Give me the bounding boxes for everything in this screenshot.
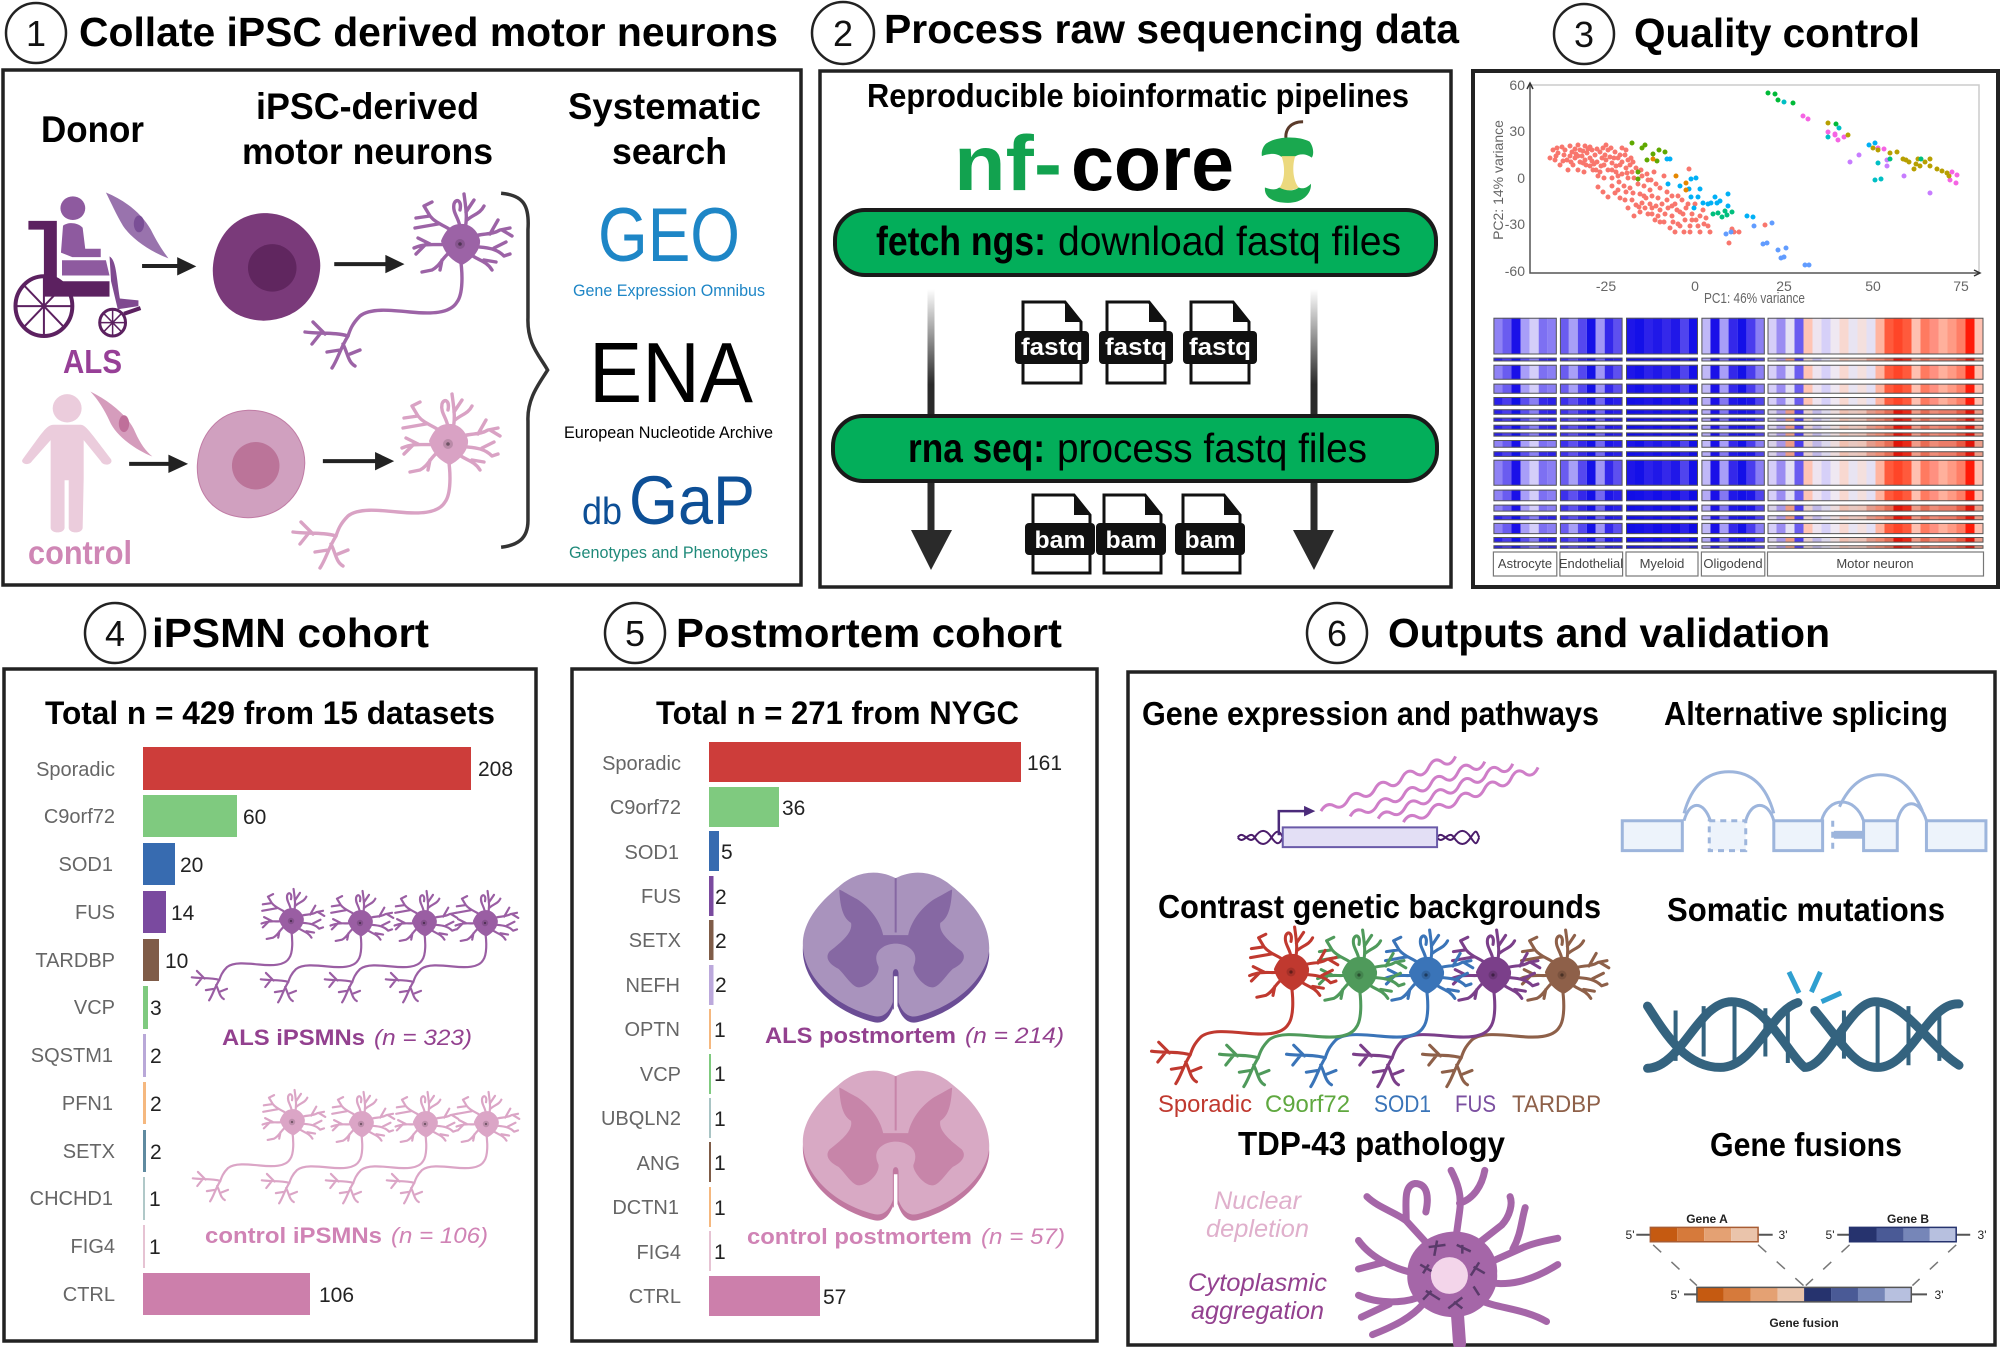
labels: gene fusion diagram: 5' xyxy=(1671,1288,1679,1302)
icon: fastq files: fastq xyxy=(1189,334,1251,361)
label: nuclear depletion xyxy=(1206,1187,1309,1243)
label: ALS iPSMNs: ALS iPSMNs xyxy=(222,1025,365,1050)
column heading: systematic search: Systematic xyxy=(568,86,761,127)
bar chart: iPSMN genetic backgrounds: PFN1 xyxy=(62,1093,113,1115)
subheading: gene expression: Gene expression and pathways xyxy=(1142,695,1599,732)
chart: PCA scatter: -25 xyxy=(1596,278,1616,294)
labels: gene fusion diagram xyxy=(1626,1212,1986,1330)
chart: marker gene heatmap xyxy=(1493,318,1984,549)
subheading: contrast genetic backgrounds: Contrast genetic backgrounds xyxy=(1158,888,1601,925)
label: cytoplasmic aggregation: Cytoplasmic xyxy=(1188,1269,1327,1297)
legend: genotype labels: SOD1 xyxy=(1374,1091,1431,1118)
column heading: iPSC-derived motor neurons xyxy=(242,86,493,172)
bar chart: postmortem genetic backgrounds: Sporadic xyxy=(602,753,681,775)
legend: genotype labels: FUS xyxy=(1455,1091,1496,1118)
bar chart: iPSMN genetic backgrounds: VCP xyxy=(74,997,115,1019)
label: ALS: ALS xyxy=(63,343,122,380)
subheading: TDP-43 pathology: TDP-43 pathology xyxy=(1238,1125,1506,1162)
bar chart: postmortem genetic backgrounds: 1 xyxy=(714,1108,726,1131)
bar chart: postmortem genetic backgrounds: 1 xyxy=(714,1152,726,1175)
step 5 number badge xyxy=(605,603,665,663)
label: ALS postmortem: ALS postmortem xyxy=(765,1023,956,1048)
bar chart: iPSMN genetic backgrounds: 2 xyxy=(150,1141,162,1164)
panel: quality control xyxy=(1473,71,1998,587)
icon: bam files: bam xyxy=(1034,527,1086,554)
icon: control iPSC xyxy=(197,410,305,518)
label: ALS postmortem: (n = 214) xyxy=(965,1023,1064,1048)
label: nuclear depletion: Nuclear xyxy=(1214,1187,1303,1215)
labels: gene fusion diagram: Gene fusion xyxy=(1769,1316,1839,1330)
pipeline: rna seq xyxy=(833,416,1437,481)
heatmap cell type labels: Motor neuron xyxy=(1836,556,1914,571)
bar chart: iPSMN genetic backgrounds: TARDBP xyxy=(35,950,115,972)
bar chart: iPSMN genetic backgrounds: 3 xyxy=(150,997,162,1020)
bar chart: iPSMN genetic backgrounds: 14 xyxy=(171,902,195,925)
arrow: iPSC to neuron xyxy=(334,255,404,273)
subheading: somatic mutations: Somatic mutations xyxy=(1667,891,1945,928)
icon: ALS motor neuron xyxy=(305,194,512,368)
logo: nf-core: core xyxy=(1071,119,1234,207)
heading: step 4: iPSMN cohort xyxy=(152,610,429,656)
bar chart: iPSMN genetic backgrounds: FIG4 xyxy=(71,1236,115,1258)
bar chart: postmortem genetic backgrounds: SETX xyxy=(629,930,681,952)
step 1 number badge xyxy=(6,3,66,63)
bar chart: postmortem genetic backgrounds: DCTN1 xyxy=(612,1197,679,1219)
arrow: control iPSC to neuron xyxy=(323,452,394,470)
step 2 number badge xyxy=(812,2,874,64)
bracket xyxy=(501,193,548,547)
bar chart: iPSMN genetic backgrounds: 2 xyxy=(150,1045,162,1068)
database: ENA: European Nucleotide Archive xyxy=(564,423,773,442)
step 6 number badge xyxy=(1307,603,1367,663)
bar chart: iPSMN genetic backgrounds: 1 xyxy=(149,1188,161,1211)
bar chart: iPSMN genetic backgrounds: 1 xyxy=(149,1236,161,1259)
step 5 number badge: 5 xyxy=(625,613,645,654)
bar chart: postmortem genetic backgrounds: 5 xyxy=(721,841,733,864)
step 4 number badge: 4 xyxy=(105,613,125,654)
step 4 number badge xyxy=(85,603,145,663)
icon: bam files: bam xyxy=(1184,527,1236,554)
icon: gene fusion diagram xyxy=(1636,1227,1970,1302)
chart: PCA scatter: 0 xyxy=(1517,170,1525,186)
arrow: control donor to iPSC xyxy=(129,455,188,473)
icon: fastq files: fastq xyxy=(1021,334,1083,361)
bar chart: postmortem genetic backgrounds: FUS xyxy=(641,886,681,908)
bar chart: iPSMN genetic backgrounds: 106 xyxy=(319,1284,354,1307)
column heading: iPSC-derived motor neurons: motor neurons xyxy=(242,131,493,172)
bar chart: iPSMN genetic backgrounds: 10 xyxy=(165,950,188,973)
label: nuclear depletion: depletion xyxy=(1206,1215,1309,1243)
bar chart: postmortem genetic backgrounds: 57 xyxy=(823,1286,846,1309)
icon: ALS iPSMN neurons xyxy=(192,889,518,1002)
labels: gene fusion diagram: 3' xyxy=(1779,1228,1787,1242)
icon: coloured neurons by genotype xyxy=(1152,927,1609,1087)
chart: PCA scatter: 50 xyxy=(1865,278,1881,294)
step 3 number badge xyxy=(1554,4,1614,64)
subheading: gene fusions: Gene fusions xyxy=(1710,1126,1902,1163)
icon: bam files xyxy=(1025,495,1245,573)
bar chart: iPSMN genetic backgrounds: SQSTM1 xyxy=(31,1045,113,1067)
chart: PCA scatter: 0 xyxy=(1691,278,1699,294)
icon: TDP-43 neuron xyxy=(1359,1170,1558,1343)
icon: ALS donor in wheelchair xyxy=(15,196,141,336)
column heading: iPSC-derived motor neurons: iPSC-derived xyxy=(256,86,479,127)
label: control iPSMNs: (n = 106) xyxy=(391,1223,488,1248)
subheading: alternative splicing: Alternative splicing xyxy=(1664,695,1948,732)
bar chart: iPSMN genetic backgrounds: 60 xyxy=(243,806,266,829)
database: GEO: Gene Expression Omnibus xyxy=(573,281,765,300)
icon: ALS spinal cord xyxy=(803,873,989,1023)
labels: gene fusion diagram: 5' xyxy=(1826,1228,1834,1242)
bar chart: iPSMN genetic backgrounds: C9orf72 xyxy=(44,806,115,828)
icon: bam files: bam xyxy=(1106,527,1156,554)
pipeline: fetch ngs: fetch ngs: xyxy=(876,218,1046,264)
bar chart: iPSMN genetic backgrounds: 2 xyxy=(150,1093,162,1116)
icon: fastq files xyxy=(1015,302,1257,383)
pipeline: rna seq: process fastq files xyxy=(1057,425,1367,471)
labels: gene fusion diagram: Gene A xyxy=(1686,1212,1728,1226)
chart: PCA scatter: -30 xyxy=(1505,216,1525,232)
label: control postmortem xyxy=(747,1224,1065,1249)
bar chart: iPSMN genetic backgrounds: SOD1 xyxy=(59,854,113,876)
chart: PCA scatter: -60 xyxy=(1505,263,1525,279)
bar chart: iPSMN genetic backgrounds: CTRL xyxy=(63,1284,115,1306)
chart: PCA scatter: PC2: 14% variance xyxy=(1490,120,1506,240)
bar chart: postmortem genetic backgrounds: 2 xyxy=(715,930,727,953)
label: cytoplasmic aggregation: aggregation xyxy=(1191,1297,1324,1325)
chart: PCA scatter: PC1: 46% variance xyxy=(1704,290,1805,307)
icon: ALS fibroblast xyxy=(106,192,168,258)
panel: process raw sequencing data xyxy=(820,71,1451,587)
chart: PCA scatter xyxy=(1490,77,1980,307)
bar chart: iPSMN genetic backgrounds: Sporadic xyxy=(36,759,115,781)
label: control iPSMNs xyxy=(205,1223,488,1248)
bar chart: postmortem genetic backgrounds: 1 xyxy=(714,1019,726,1042)
bar chart: postmortem genetic backgrounds: VCP xyxy=(640,1064,681,1086)
step 1 number badge: 1 xyxy=(26,13,46,54)
bar chart: iPSMN genetic backgrounds: 208 xyxy=(478,758,513,781)
labels: gene fusion diagram: Gene B xyxy=(1887,1212,1929,1226)
icon: control iPSMN neurons xyxy=(193,1090,519,1203)
arrow: right pipeline flow xyxy=(1293,289,1334,570)
chart: PCA scatter: 25 xyxy=(1776,278,1792,294)
panel: collate iPSC motor neurons xyxy=(3,70,801,585)
arrow: left pipeline flow xyxy=(911,289,952,570)
database: ENA: ENA xyxy=(589,326,753,421)
label: control: control xyxy=(28,534,132,571)
bar chart: postmortem genetic backgrounds: ANG xyxy=(637,1153,680,1175)
chart heading: Total n = 429 from 15 datasets xyxy=(45,695,495,731)
bar chart: postmortem genetic backgrounds: OPTN xyxy=(624,1019,680,1041)
step 3 number badge: 3 xyxy=(1574,14,1594,55)
panel: postmortem cohort xyxy=(572,669,1097,1341)
database: GEO xyxy=(573,193,765,300)
subheading: Reproducible bioinformatic pipelines xyxy=(867,77,1409,114)
chart: PCA scatter: 30 xyxy=(1509,123,1525,139)
logo: nf-core: nf- xyxy=(954,119,1062,207)
column heading: systematic search: search xyxy=(612,131,727,172)
column heading: donor: Donor xyxy=(41,109,144,150)
icon: apple core xyxy=(1262,122,1313,203)
label: ALS iPSMNs: (n = 323) xyxy=(374,1025,472,1050)
bar chart: iPSMN genetic backgrounds: FUS xyxy=(75,902,115,924)
icon: transcription xyxy=(1238,756,1538,847)
bar chart: iPSMN genetic backgrounds: SETX xyxy=(63,1141,115,1163)
chart: PCA scatter: 75 xyxy=(1953,278,1969,294)
bar chart: iPSMN genetic backgrounds: CHCHD1 xyxy=(30,1188,113,1210)
pipeline: fetch ngs: download fastq files xyxy=(1058,218,1401,264)
icon: ALS iPSC xyxy=(213,213,320,321)
chart heading: Total n = 271 from NYGC xyxy=(656,695,1019,731)
heatmap cell type labels xyxy=(1493,552,1984,576)
arrow: donor to iPSC xyxy=(142,257,196,276)
label: control postmortem: (n = 57) xyxy=(981,1224,1065,1249)
bar chart: postmortem genetic backgrounds: 161 xyxy=(1027,752,1062,775)
database: dbGaP: Genotypes and Phenotypes xyxy=(569,543,768,562)
legend: genotype labels xyxy=(1158,1091,1601,1118)
bar chart: postmortem genetic backgrounds: UBQLN2 xyxy=(601,1108,681,1130)
icon: control spinal cord xyxy=(803,1071,989,1221)
icon: control fibroblast xyxy=(90,392,152,457)
heading: step 2: Process raw sequencing data xyxy=(884,6,1460,52)
step 2 number badge: 2 xyxy=(833,13,853,54)
heading: step 3: Quality control xyxy=(1634,10,1920,56)
labels: gene fusion diagram: 5' xyxy=(1626,1228,1634,1242)
chart: PCA scatter: 60 xyxy=(1509,77,1525,93)
icon: control donor xyxy=(22,394,111,532)
heading: step 6: Outputs and validation xyxy=(1388,610,1830,656)
panel: outputs and validation xyxy=(1128,672,1995,1345)
bar chart: postmortem genetic backgrounds: 2 xyxy=(715,974,727,997)
bar chart: postmortem genetic backgrounds: C9orf72 xyxy=(610,797,681,819)
icon: alternative splicing xyxy=(1622,772,1986,851)
legend: genotype labels: TARDBP xyxy=(1512,1091,1601,1118)
panel: iPSMN cohort xyxy=(4,669,536,1341)
heatmap cell type labels: Myeloid xyxy=(1640,556,1684,571)
step 6 number badge: 6 xyxy=(1327,613,1347,654)
label: ALS postmortem xyxy=(765,1023,1064,1048)
database: dbGaP: GaP xyxy=(629,462,755,539)
legend: genotype labels: Sporadic xyxy=(1158,1091,1252,1118)
bar chart: postmortem genetic backgrounds: 2 xyxy=(715,886,727,909)
label: ALS iPSMNs xyxy=(222,1025,472,1050)
bar chart: postmortem genetic backgrounds: CTRL xyxy=(629,1286,681,1308)
database: dbGaP: db xyxy=(582,491,622,533)
label: control iPSMNs: control iPSMNs xyxy=(205,1223,382,1248)
icon: fastq files: fastq xyxy=(1105,334,1167,361)
bar chart: postmortem genetic backgrounds: 1 xyxy=(714,1241,726,1264)
logo: nf-core xyxy=(954,119,1234,207)
labels: gene fusion diagram: 3' xyxy=(1935,1288,1943,1302)
bar chart: postmortem genetic backgrounds: NEFH xyxy=(626,975,680,997)
bar chart: iPSMN genetic backgrounds xyxy=(30,747,513,1315)
bar chart: postmortem genetic backgrounds: SOD1 xyxy=(625,842,679,864)
heading: step 1: Collate iPSC derived motor neurons xyxy=(79,9,778,55)
label: control postmortem: control postmortem xyxy=(747,1224,972,1249)
icon: DNA somatic mutation xyxy=(1648,972,1959,1068)
label: cytoplasmic aggregation xyxy=(1188,1269,1327,1325)
pipeline: fetch ngs xyxy=(835,210,1436,275)
bar chart: iPSMN genetic backgrounds: 20 xyxy=(180,854,203,877)
legend: genotype labels: C9orf72 xyxy=(1265,1091,1350,1118)
labels: gene fusion diagram: 3' xyxy=(1978,1228,1986,1242)
bar chart: postmortem genetic backgrounds: 1 xyxy=(714,1197,726,1220)
heatmap cell type labels: Astrocyte xyxy=(1498,556,1552,571)
column heading: systematic search xyxy=(568,86,761,172)
database: dbGaP xyxy=(569,462,768,562)
heatmap cell type labels: Endothelial xyxy=(1559,556,1623,571)
database: ENA xyxy=(564,326,773,442)
bar chart: postmortem genetic backgrounds: 36 xyxy=(782,797,805,820)
bar chart: postmortem genetic backgrounds: FIG4 xyxy=(637,1242,681,1264)
database: GEO: GEO xyxy=(598,193,740,278)
heading: step 5: Postmortem cohort xyxy=(676,610,1062,656)
icon: control motor neuron xyxy=(293,394,500,568)
pipeline: rna seq: rna seq: xyxy=(908,425,1045,471)
bar chart: postmortem genetic backgrounds xyxy=(601,742,1062,1316)
bar chart: postmortem genetic backgrounds: 1 xyxy=(714,1063,726,1086)
heatmap cell type labels: Oligodend xyxy=(1703,556,1763,571)
